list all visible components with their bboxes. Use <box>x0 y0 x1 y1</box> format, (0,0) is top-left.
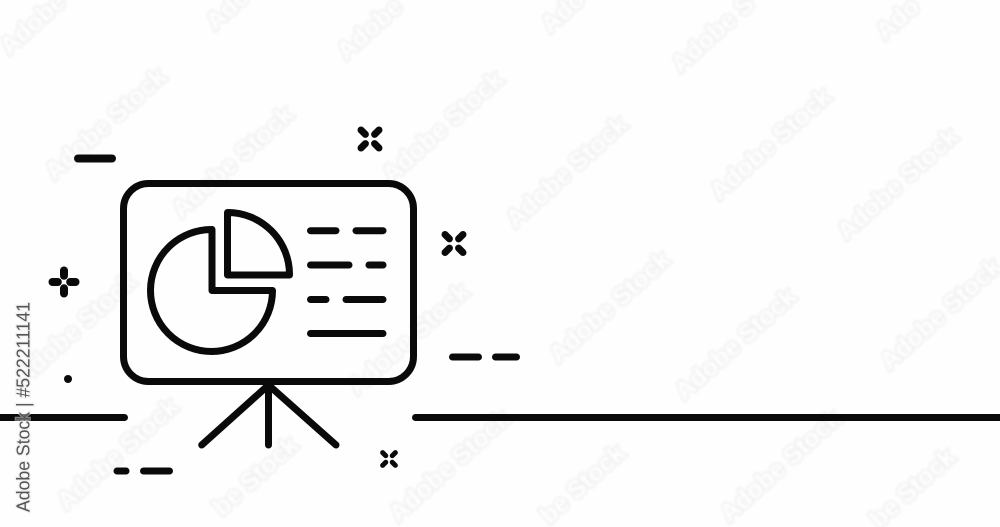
ground line: left segment <box>0 414 128 421</box>
sparkle: bottom <box>376 446 402 472</box>
watermark pattern: Adobe Stock <box>10 267 142 391</box>
watermark pattern: Adobe Stock <box>832 122 964 246</box>
watermark pattern: Adobe Stock <box>52 392 184 516</box>
dash: top left <box>78 154 112 162</box>
watermark pattern: be Stock <box>535 439 631 527</box>
pie chart: small sector <box>228 212 290 275</box>
text lines <box>310 231 383 334</box>
watermark pattern: Adobe Stock <box>343 277 475 401</box>
side credit text: Adobe Stock | #522211141 <box>14 302 34 512</box>
watermark pattern: Adobe Stock <box>384 404 516 527</box>
presentation board icon <box>124 184 414 445</box>
dashes: bottom left <box>117 468 170 474</box>
sparkle: left plus <box>52 270 76 294</box>
watermark pattern: Adobe Stock <box>501 110 633 234</box>
sparkle: right <box>436 226 472 261</box>
dashes: right of board <box>452 354 516 360</box>
pie chart: large sector <box>150 229 272 351</box>
ground line: right segment <box>412 414 1000 421</box>
watermark pattern: be Stock <box>208 431 304 521</box>
watermark pattern: Adobe Stock <box>377 65 509 189</box>
watermark pattern: Adobe Stock <box>705 82 837 206</box>
watermark pattern: Adobe Stock <box>544 245 676 369</box>
watermark pattern: Adobe Stock <box>715 404 847 527</box>
watermark pattern: Adobe Stock <box>670 282 802 406</box>
watermark pattern: Adobe Stock <box>40 62 172 186</box>
tripod stand <box>202 385 336 445</box>
watermark pattern: Adobe Stock <box>167 100 299 224</box>
board frame <box>124 184 414 382</box>
dot <box>64 375 72 383</box>
sparkle: top <box>352 121 388 157</box>
